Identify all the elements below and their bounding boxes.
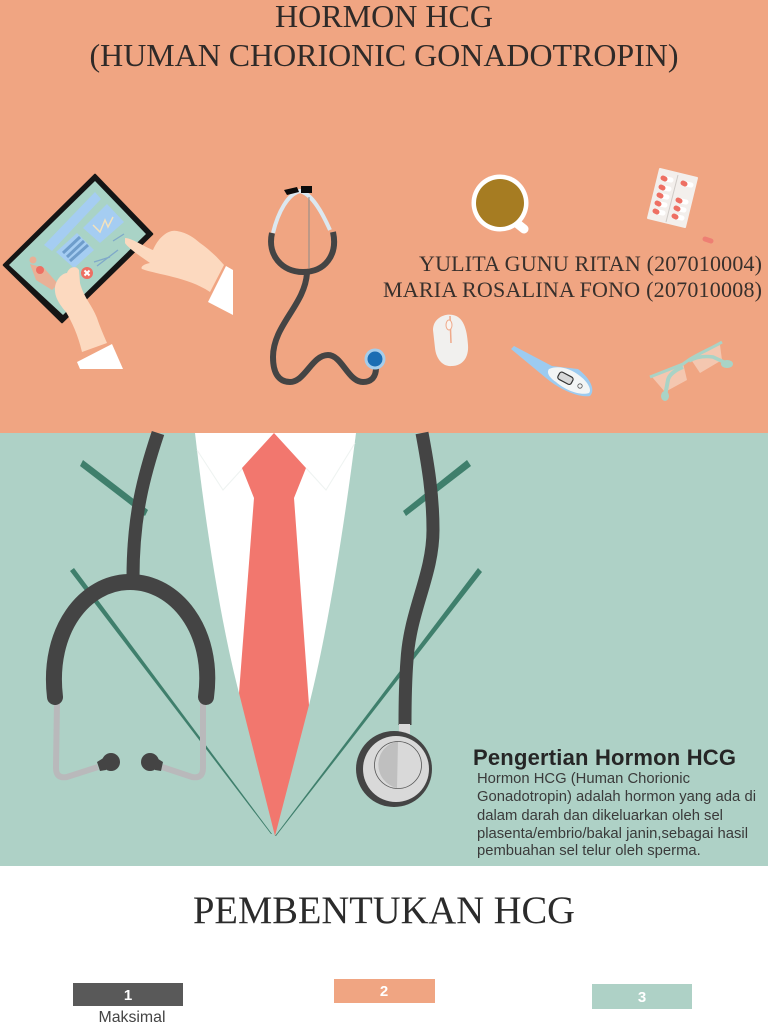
icon: thermometer — [511, 346, 592, 396]
icon: left sleeve — [77, 344, 123, 369]
step 2 — [334, 979, 435, 1003]
icon: small stethoscope — [271, 186, 386, 382]
step 2: 2 — [380, 983, 388, 1000]
icon: coffee cup — [472, 174, 528, 232]
large stethoscope headset — [54, 433, 207, 777]
title: (HUMAN CHORIONIC GONADOTROPIN) — [90, 38, 678, 73]
definition text — [477, 771, 756, 859]
icon: left hand — [55, 267, 107, 352]
left lapel line — [70, 568, 272, 834]
icon: glasses — [650, 342, 733, 401]
authors text: YULITA GUNU RITAN (207010004) — [419, 251, 762, 276]
necktie — [239, 433, 309, 836]
heading: pengertian: Pengertian Hormon HCG — [473, 745, 736, 770]
left pocket line — [80, 460, 148, 516]
step 1 — [73, 983, 183, 1006]
panel: white lower section — [0, 866, 768, 1024]
panel: peach header — [0, 0, 768, 433]
definition text: Hormon HCG (Human Chorionic — [477, 771, 691, 787]
chest piece — [356, 724, 432, 807]
icon: loose pill — [705, 239, 711, 241]
right lapel line — [275, 568, 482, 836]
icon: body figure — [30, 256, 58, 290]
icon: tablet with hands — [4, 175, 233, 369]
heading: pembentukan: PEMBENTUKAN HCG — [193, 889, 575, 932]
authors text — [383, 251, 762, 302]
authors text: MARIA ROSALINA FONO (207010008) — [383, 277, 762, 302]
icon: computer mouse — [433, 315, 468, 366]
panel: green coat — [0, 433, 768, 866]
step 3: 3 — [638, 989, 646, 1006]
definition text: Gonadotropin) adalah hormon yang ada di — [477, 789, 756, 805]
definition text: dalam darah dan dikeluarkan oleh sel — [477, 808, 723, 824]
icon: right sleeve — [208, 266, 233, 315]
right pocket line — [403, 460, 471, 516]
step 1: 1 — [124, 987, 132, 1004]
definition text: pembuahan sel telur oleh sperma. — [477, 843, 701, 859]
icon: right hand — [125, 231, 224, 292]
definition text: plasenta/embrio/bakal janin,sebagai hasil — [477, 826, 748, 842]
icon: pill blister — [648, 169, 697, 227]
shirt — [195, 433, 356, 705]
title: HORMON HCG — [275, 0, 493, 34]
step 3 — [592, 984, 692, 1009]
title — [90, 0, 678, 73]
icon: close badge — [81, 267, 93, 279]
large stethoscope tube — [405, 433, 433, 725]
collar outline — [197, 443, 355, 490]
